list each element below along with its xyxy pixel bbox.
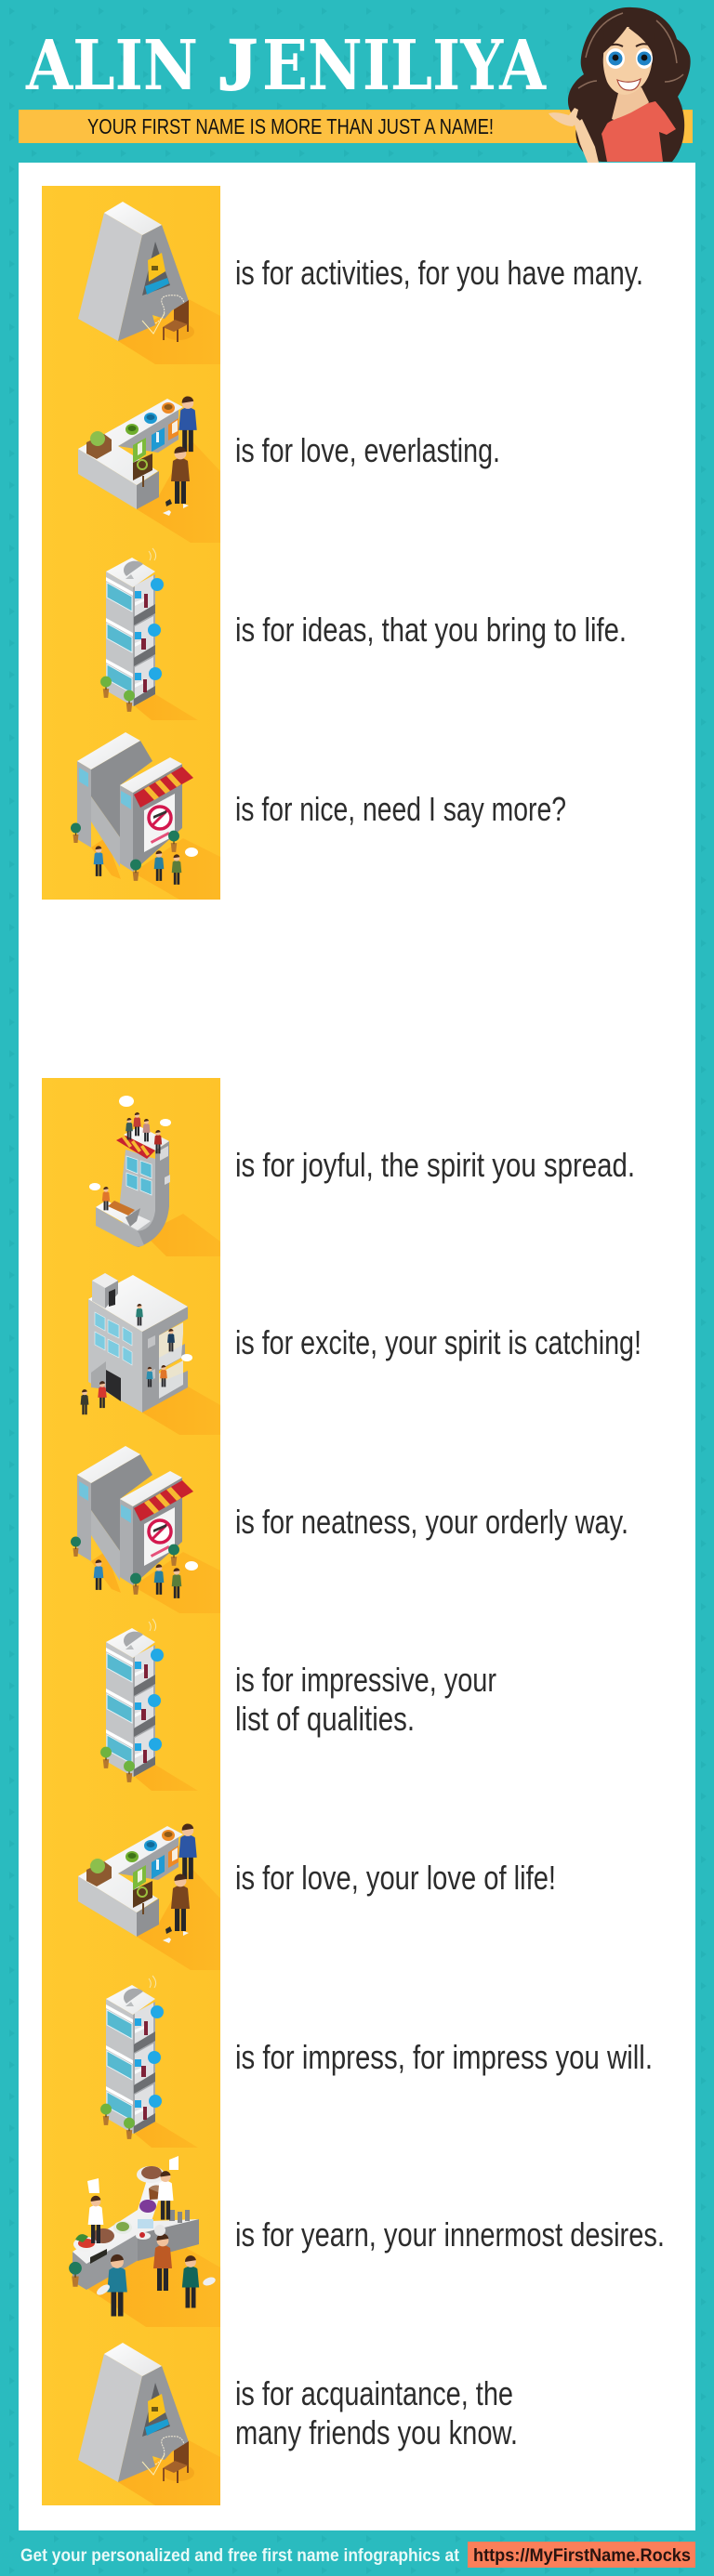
title: ALIN bbox=[25, 26, 198, 106]
panel: last name tiles background bbox=[42, 1078, 220, 2505]
panel: first name tiles background bbox=[42, 186, 220, 900]
text: N line: is for neatness, your orderly way. bbox=[235, 1503, 628, 1541]
icon: letter A building bbox=[78, 202, 220, 364]
text: A lines: is for acquaintance, the bbox=[235, 2374, 513, 2412]
text: J line: is for joyful, the spirit you spread. bbox=[235, 1146, 635, 1184]
title: ENILIYA bbox=[262, 26, 547, 106]
text: L line: is for love, your love of life! bbox=[235, 1859, 556, 1897]
icon: letter N building bbox=[71, 732, 220, 900]
footer url badge: https://MyFirstName.Rocks bbox=[473, 2546, 691, 2566]
icon: letter L counter bbox=[78, 396, 220, 543]
icon: letter J building bbox=[89, 1096, 220, 1256]
subtitle banner: YOUR FIRST NAME IS MORE THAN JUST A NAME! bbox=[87, 114, 494, 138]
icon: letter I tower bbox=[100, 548, 198, 720]
text: I lines: is for impressive, your bbox=[235, 1661, 496, 1699]
icon: letter L counter bbox=[78, 1823, 220, 1970]
text: N line: is for nice, need I say more? bbox=[235, 790, 566, 828]
icon: letter Y buffet bbox=[69, 2156, 220, 2327]
text: I lines bbox=[235, 1661, 496, 1738]
icon: letter I tower bbox=[100, 1976, 198, 2148]
text: I line: is for ideas, that you bring to life. bbox=[235, 611, 627, 649]
subtitle banner bbox=[19, 110, 693, 143]
text: L line: is for love, everlasting. bbox=[235, 431, 500, 469]
footer text: Get your personalized and free first name infographics at bbox=[20, 2546, 460, 2566]
icon: letter E building bbox=[81, 1273, 220, 1435]
icon: letter A building bbox=[78, 2343, 220, 2505]
mascot: cartoon woman presenting bbox=[549, 7, 691, 163]
icon: letter N building bbox=[71, 1446, 220, 1613]
text: A lines: many friends you know. bbox=[235, 2413, 518, 2451]
text: I lines: list of qualities. bbox=[235, 1700, 415, 1738]
icon: letter I tower bbox=[100, 1619, 198, 1791]
title bbox=[25, 21, 547, 106]
text: A lines bbox=[235, 2374, 518, 2451]
title: J bbox=[218, 21, 258, 106]
